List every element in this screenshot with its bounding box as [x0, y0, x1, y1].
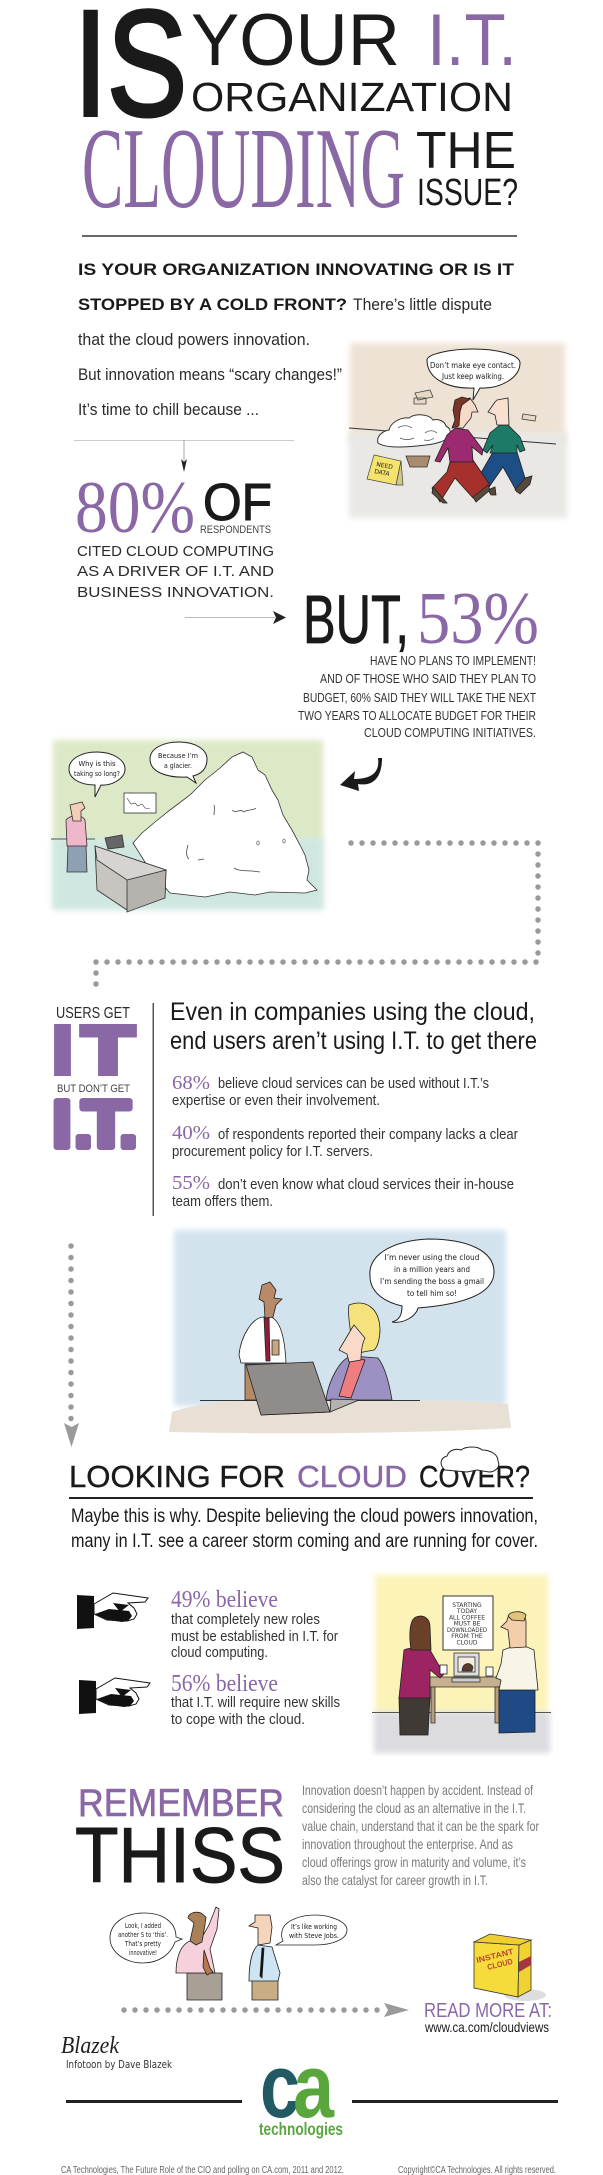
title: THE [416, 122, 516, 180]
speech bubble: to tell him so! [407, 1289, 457, 1298]
speech bubble: in a million years and [394, 1265, 470, 1274]
dotted arrow: down [64, 1246, 79, 1447]
stat: 68%: believe cloud services can be used without I.T.’s [218, 1076, 489, 1092]
text block: maybe this is why [71, 1506, 538, 1552]
title [74, 0, 518, 233]
poster: ALL COFFEE [449, 1614, 485, 1622]
speech bubble [427, 349, 520, 400]
heading block: users get I.T.: BUT DON’T GET [57, 1083, 130, 1095]
text block: innovation: cloud offerings grow in maturity and volume, it’s [302, 1854, 526, 1870]
stat: 80% of respondents [75, 467, 274, 601]
woman [326, 1303, 392, 1400]
speech bubble [150, 742, 207, 783]
signature: Blazek [61, 2033, 119, 2059]
stat: 55%: team offers them. [172, 1194, 273, 1210]
title: YOUR [191, 0, 400, 81]
speech bubble [69, 752, 125, 797]
speech bubble: with Steve Jobs. [289, 1932, 339, 1940]
logo: CA technologies: technologies [259, 2119, 343, 2139]
stat: 40%: of respondents reported their company lacks a clear [218, 1127, 518, 1143]
heading: looking for cloud cover: COVER? [419, 1459, 530, 1494]
stat: 55% [172, 1172, 514, 1210]
person left [176, 1907, 222, 2000]
stat: 40%: procurement policy for I.T. servers. [172, 1144, 373, 1160]
text block: 49% believe: that completely new roles [171, 1612, 320, 1628]
desk [429, 1653, 502, 1723]
intro text: There’s little dispute [353, 295, 492, 314]
heading: remember this: REMEMBER [78, 1782, 284, 1825]
intro text: It’s time to chill because ... [78, 400, 259, 419]
stat: 55%: don’t even know what cloud services their in-house [218, 1177, 514, 1193]
arrow: right to 53% [185, 611, 286, 624]
heading block: users get I.T.: T [82, 1013, 134, 1088]
stats list [172, 1072, 518, 1210]
icon: pointing hand [77, 1593, 148, 1629]
poster: CLOUD [456, 1640, 478, 1646]
stat: but 53%: HAVE NO PLANS TO IMPLEMENT! [370, 654, 536, 668]
desk [95, 835, 166, 912]
cartoon: laptop user [169, 1230, 511, 1433]
heading block: users get I.T.: USERS GET [56, 1005, 130, 1022]
intro text: STOPPED BY A COLD FRONT? [78, 296, 347, 314]
intro text: But innovation means “scary changes!” [78, 365, 342, 384]
poster: FROM THE [451, 1633, 483, 1640]
stat: 40%: 40% [172, 1122, 210, 1144]
cartoon: walking past the cloud [349, 343, 567, 518]
poster: MUST BE [454, 1620, 481, 1628]
icon: instant cloud box [474, 1934, 546, 2001]
stat: but 53%: BUDGET, 60% SAID THEY WILL TAKE THE NEXT [303, 691, 536, 705]
icon: cloud [441, 1447, 499, 1472]
man [486, 1612, 538, 1733]
heading block: users get I.T.: I [52, 1087, 72, 1162]
poster: TODAY [456, 1608, 477, 1615]
sign: need data [367, 455, 403, 485]
arrow: down to 80% [74, 440, 294, 472]
speech bubble: Because I’m [158, 751, 198, 760]
heading: remember this: THISS [75, 1811, 285, 1899]
stat: but 53%: TWO YEARS TO ALLOCATE BUDGET FOR THEIR [298, 709, 536, 723]
logo: CA technologies: a [293, 2037, 335, 2137]
text block: 56% believe: 56% believe [171, 1671, 278, 1697]
sign: need data: DATA [374, 468, 391, 478]
text block: innovation: also the catalyst for career growth in I.T. [302, 1872, 488, 1888]
speech bubble: Don’t make eye contact. [430, 361, 516, 370]
stat: 80% of respondents: 80% [75, 467, 195, 549]
text block: 56% believe [171, 1671, 340, 1728]
man [239, 1282, 286, 1400]
read more: READ MORE AT: [424, 1999, 552, 2022]
intro text: that the cloud powers innovation. [78, 330, 310, 349]
text block: 49% believe [171, 1587, 338, 1661]
stat: but 53%: CLOUD COMPUTING INITIATIVES. [364, 726, 536, 740]
text block: 49% believe: 49% believe [171, 1587, 278, 1613]
dotted connector [96, 843, 538, 990]
logo: CA technologies: c [260, 2037, 300, 2137]
speech bubble: another S to ‘this’. [118, 1931, 168, 1939]
speech bubble: It’s like working [291, 1923, 337, 1931]
intro text [78, 261, 514, 419]
stat: 80% of respondents: OF [203, 474, 272, 532]
stat: 55%: 55% [172, 1172, 210, 1194]
cartoon: coffee from the cloud [372, 1575, 551, 1753]
intro text: IS YOUR ORGANIZATION INNOVATING OR IS IT [78, 261, 514, 279]
text block: 49% believe: cloud computing. [171, 1645, 268, 1661]
stat: but 53%: BUT, [303, 581, 409, 658]
title: I.T. [427, 0, 517, 81]
heading: even in companies: end users aren’t using I.T. to get there [170, 1027, 537, 1055]
speech bubble: I’m sending the boss a gmail [380, 1277, 484, 1286]
heading block: users get I.T. [52, 1005, 138, 1162]
heading block: users get I.T.: . [74, 1087, 93, 1162]
sign: need data: NEED [376, 461, 394, 471]
read more: www.ca.com/cloudviews [424, 2019, 549, 2035]
chart frame [124, 793, 156, 813]
logo: CA technologies [259, 2037, 343, 2139]
speech bubble: taking so long? [74, 769, 120, 778]
heading block: users get I.T.: . [119, 1087, 138, 1162]
cartoon: glacier [51, 740, 324, 912]
speech bubble: innovative! [129, 1949, 157, 1957]
speech bubble: Just keep walking. [441, 372, 504, 381]
laptop [246, 1362, 359, 1415]
stat: 68% [172, 1072, 489, 1109]
speech bubble: Why is this [78, 759, 116, 768]
stat: 80% of respondents: CITED CLOUD COMPUTING [77, 543, 274, 560]
speech bubble [110, 1913, 182, 1963]
stat: 80% of respondents: RESPONDENTS [200, 524, 271, 536]
text block: innovation: innovation throughout the enterprise. And as [302, 1836, 513, 1852]
heading: looking for cloud cover [69, 1459, 530, 1494]
speech bubble: That’s pretty [124, 1940, 161, 1948]
text block: 56% believe: that I.T. will require new skills [171, 1695, 340, 1711]
stat: but 53% [298, 578, 539, 740]
text block: 49% believe: must be established in I.T. for [171, 1629, 338, 1645]
signature [61, 2033, 173, 2071]
poster [443, 1596, 493, 1650]
speech bubble [276, 1915, 347, 1945]
stat: 68%: 68% [172, 1072, 210, 1094]
read more [424, 1999, 552, 2035]
heading: looking for cloud cover: CLOUD [297, 1459, 407, 1494]
title: ORGANIZATION [191, 74, 513, 120]
person right [249, 1915, 280, 2000]
stat: but 53%: AND OF THOSE WHO SAID THEY PLAN TO [320, 672, 536, 686]
poster: STARTING [452, 1602, 482, 1609]
arrow: curved [340, 758, 382, 791]
heading: looking for cloud cover: LOOKING FOR [69, 1459, 285, 1494]
heading block: users get I.T.: I [52, 1013, 72, 1088]
text block: innovation: considering the cloud as an alternative in the I.T. [302, 1800, 526, 1816]
title: ISSUE? [417, 172, 518, 214]
heading block: users get I.T.: T [82, 1087, 130, 1162]
speech bubble [370, 1239, 494, 1322]
man [478, 398, 532, 495]
text block: innovation [302, 1782, 539, 1888]
woman [432, 397, 490, 503]
stat: 80% of respondents: AS A DRIVER OF I.T. AND [77, 563, 274, 580]
rule lines [66, 2100, 242, 2103]
speech bubble: I’m never using the cloud [384, 1253, 480, 1262]
icon: instant cloud box: CLOUD [486, 1957, 514, 1972]
stat: 68%: expertise or even their involvement. [172, 1093, 380, 1109]
heading: even in companies: Even in companies using the cloud, [170, 998, 535, 1026]
text block: innovation: Innovation doesn’t happen by accident. Instead of [302, 1782, 533, 1798]
stat: 80% of respondents: BUSINESS INNOVATION. [77, 584, 274, 601]
icon: instant cloud box: INSTANT [475, 1947, 514, 1965]
man [66, 802, 87, 872]
dotted arrow: right [124, 2003, 409, 2017]
stat: 40% [172, 1122, 518, 1160]
cartoon: two colleagues [110, 1907, 347, 2000]
woman [399, 1616, 447, 1735]
heading: even in companies [170, 998, 537, 1055]
icon: pointing hand [79, 1678, 150, 1714]
poster: DOWNLOADED [447, 1627, 487, 1634]
stat: but 53%: 53% [417, 578, 539, 660]
speech bubble: a glacier. [164, 761, 192, 770]
speech bubble: Look, I added [125, 1922, 161, 1930]
text block: 56% believe: to cope with the cloud. [171, 1712, 305, 1728]
signature: Infotoon by Dave Blazek [66, 2059, 173, 2071]
